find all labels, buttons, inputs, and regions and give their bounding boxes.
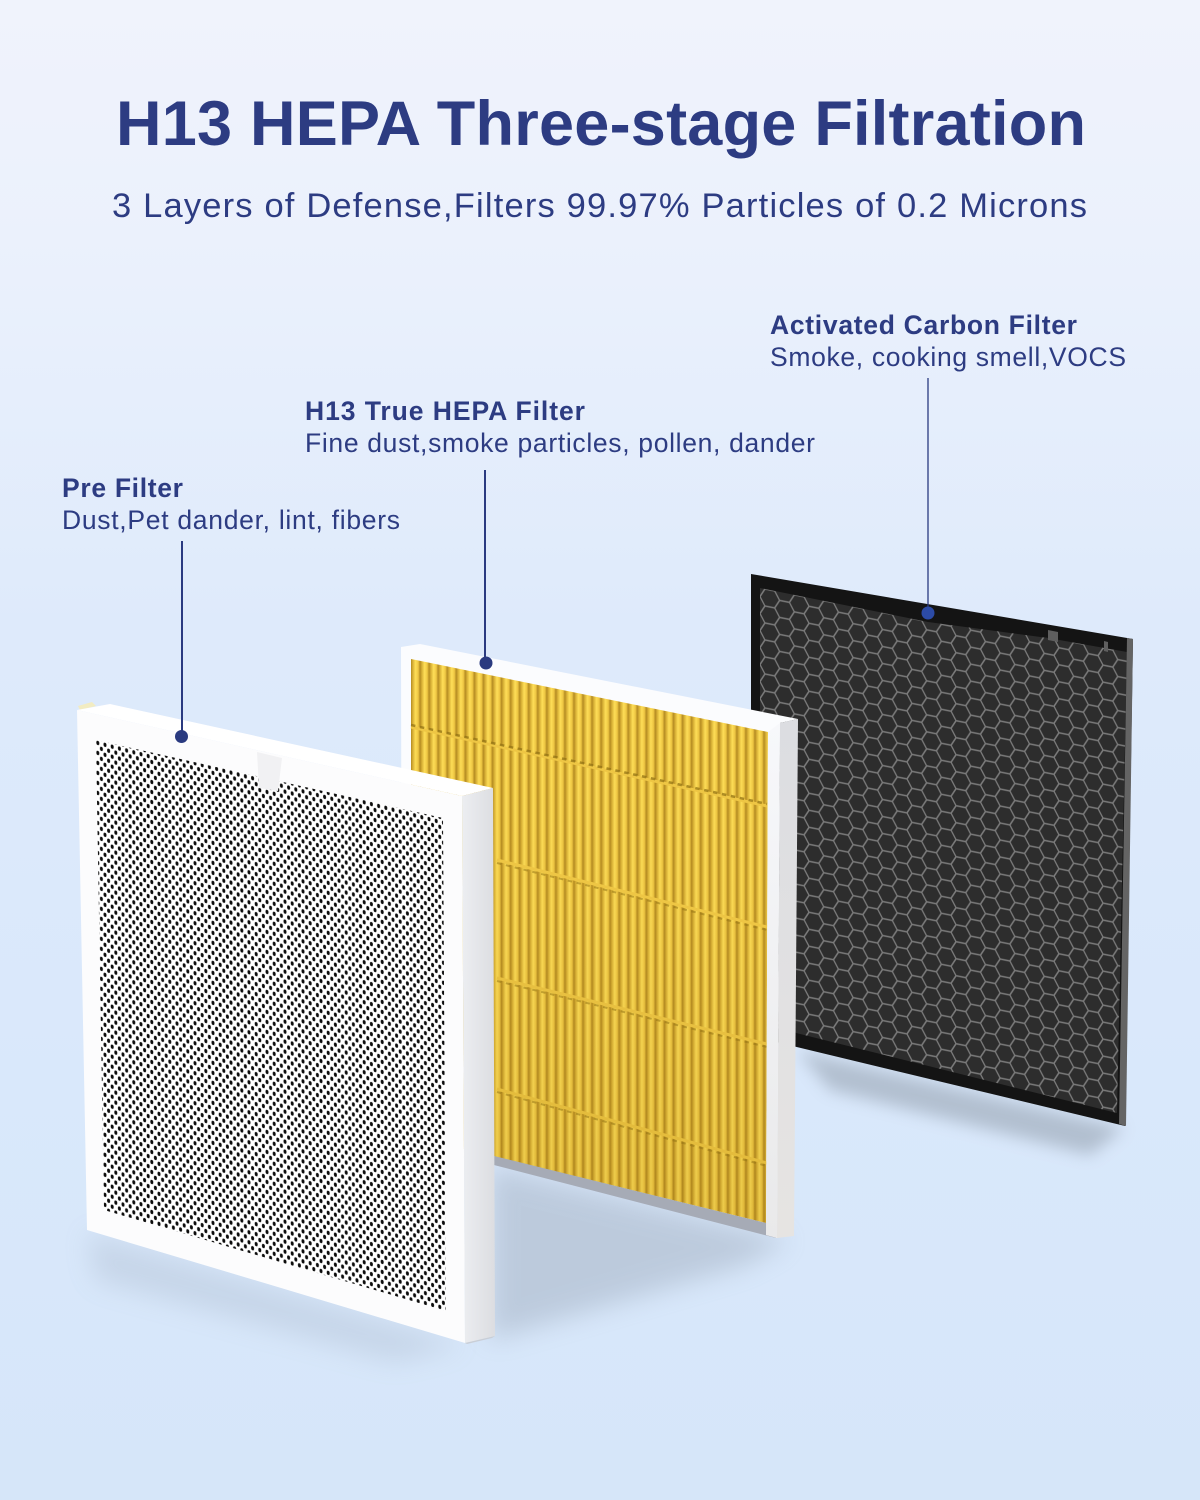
leader line bbox=[484, 470, 486, 663]
yellow media shading bbox=[411, 659, 768, 1223]
yellow media support bar 3 bbox=[497, 978, 767, 1047]
callout heading: Activated Carbon Filter bbox=[770, 310, 1077, 340]
carbon filter grey side edge bbox=[1119, 638, 1133, 1126]
carbon filter floor shadow bbox=[797, 1050, 1124, 1155]
pre filter panel bbox=[77, 702, 495, 1362]
HEPA front white frame bbox=[401, 644, 798, 1238]
callout: activated carbon filter bbox=[770, 310, 1126, 620]
callout description: Dust,Pet dander, lint, fibers bbox=[62, 505, 400, 535]
pre filter floor shadow bbox=[87, 1232, 465, 1362]
title: H13 HEPA Three-stage Filtration bbox=[116, 89, 1086, 159]
HEPA floor shadow bbox=[490, 1165, 790, 1340]
callout: pre filter bbox=[62, 473, 400, 743]
pre filter tab bbox=[257, 752, 282, 791]
pre filter yellow glint bbox=[78, 702, 96, 710]
leader dot bbox=[922, 606, 934, 620]
HEPA frame inner grey lip bbox=[490, 1155, 776, 1238]
callout heading: Pre Filter bbox=[62, 473, 183, 503]
carbon filter frame notches bbox=[1048, 630, 1108, 652]
pre filter top edge bbox=[77, 704, 493, 796]
yellow pleated media bbox=[411, 659, 768, 1223]
yellow media support bar 2 bbox=[497, 860, 767, 930]
callout: H13 true HEPA filter bbox=[305, 396, 815, 670]
callout description: Smoke, cooking smell,VOCS bbox=[770, 342, 1126, 372]
yellow media support bar 1 bbox=[411, 725, 767, 806]
leader dot bbox=[480, 656, 492, 670]
pre filter side bbox=[462, 788, 495, 1343]
leader line bbox=[927, 378, 929, 612]
carbon filter black frame bbox=[751, 574, 1133, 1126]
HEPA filter panel bbox=[401, 644, 798, 1340]
yellow media support bar 4 bbox=[497, 1089, 767, 1166]
honeycomb carbon media bbox=[760, 588, 1127, 1113]
HEPA frame lower right strip bbox=[766, 723, 780, 1238]
pre filter perforated mesh bbox=[96, 740, 446, 1311]
leader dot bbox=[175, 730, 188, 743]
callout heading: H13 True HEPA Filter bbox=[305, 396, 585, 426]
HEPA frame side bbox=[777, 719, 798, 1238]
leader line bbox=[181, 541, 183, 737]
callout description: Fine dust,smoke particles, pollen, dander bbox=[305, 428, 815, 458]
pre filter front frame bbox=[77, 710, 465, 1343]
subtitle: 3 Layers of Defense,Filters 99.97% Particles of 0.2 Microns bbox=[112, 187, 1087, 225]
pre filter bottom lip bbox=[465, 1336, 495, 1344]
carbon filter panel bbox=[751, 574, 1133, 1155]
